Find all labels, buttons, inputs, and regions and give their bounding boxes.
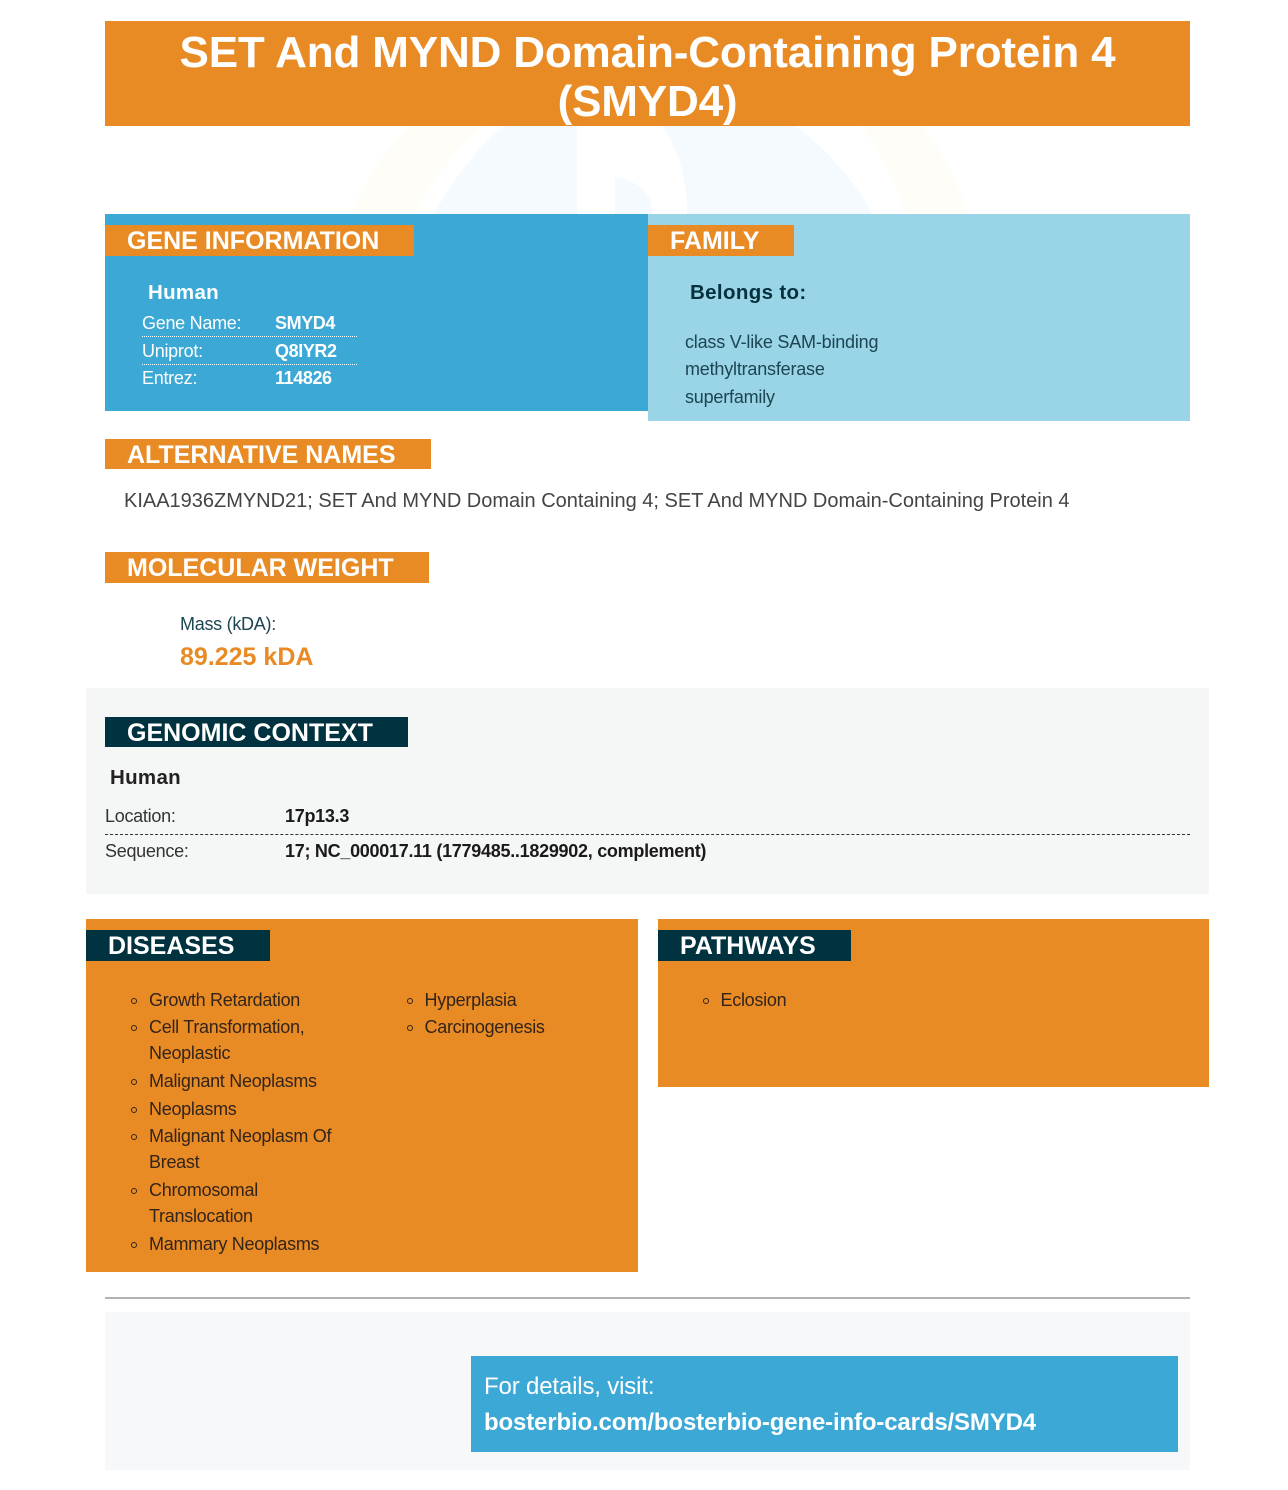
species label: Human [148,281,219,304]
disease list column 1: Translocation [149,1206,253,1226]
disease list column 1 [131,990,332,1254]
disease list column 1: Growth Retardation [149,990,300,1010]
disease list column 1: Breast [149,1152,199,1172]
uniprot row: Q8IYR2 [275,341,337,361]
family description [685,332,878,407]
disease list column 1: Malignant Neoplasms [149,1071,317,1091]
location row: Location: [105,806,176,826]
uniprot row: Uniprot: [142,341,203,361]
alternative names text: KIAA1936ZMYND21; SET And MYND Domain Containing 4; SET And MYND Domain-Containing Protein 4 [124,490,1069,512]
disease list column 1: Mammary Neoplasms [149,1234,319,1254]
entrez row: Entrez: [142,368,197,388]
details url: bosterbio.com/bosterbio-gene-info-cards/SMYD4 [484,1409,1036,1436]
heading: diseases [86,930,270,961]
watermark logo [434,126,872,214]
species label: Human [110,766,181,789]
heading: gene information: GENE INFORMATION [127,227,379,255]
disease list column 2 [407,990,545,1037]
heading: diseases: DISEASES [108,932,234,960]
heading: molecular weight: MOLECULAR WEIGHT [127,554,394,582]
panel: family [648,214,1190,421]
panel: pathways [658,919,1209,1087]
belongs to label: Belongs to: [690,281,807,304]
sequence row: 17; NC_000017.11 (1779485..1829902, complement) [285,841,706,861]
mass value: 89.225 kDA [180,643,313,671]
uniprot row [142,339,357,365]
gene name row [142,311,357,337]
disease list column 1: Neoplastic [149,1043,230,1063]
gene name row: SMYD4 [275,313,335,333]
details label: For details, visit: [484,1373,654,1400]
callout: details link [471,1356,1178,1452]
family description: methyltransferase [685,359,825,379]
heading: alternative names: ALTERNATIVE NAMES [127,441,396,469]
family description: superfamily [685,386,775,406]
disease list column 1: Chromosomal [149,1180,258,1200]
entrez row: 114826 [275,368,332,388]
gene name row: Gene Name: [142,313,241,333]
disease list column 1: Cell Transformation, [149,1017,304,1037]
heading: family: FAMILY [670,227,759,255]
family description: class V-like SAM-binding [685,332,878,352]
disease list column 1: Malignant Neoplasm Of [149,1126,331,1146]
title banner [105,21,1190,126]
location row [105,802,1190,835]
panel: genomic context [86,688,1209,894]
sequence row: Sequence: [105,841,189,861]
mass label: Mass (kDA): [180,614,276,634]
location row: 17p13.3 [285,806,349,826]
panel: footer [105,1312,1190,1470]
panel: gene information [105,214,648,411]
disease list column 2: Carcinogenesis [424,1017,545,1037]
heading: pathways [658,930,851,961]
panel: diseases [86,919,638,1272]
disease list column 1: Neoplasms [149,1099,237,1119]
pathway list: Eclosion [720,990,786,1010]
title banner: SET And MYND Domain-Containing Protein 4 [180,28,1115,77]
disease list column 2: Hyperplasia [424,990,516,1010]
heading: pathways: PATHWAYS [680,932,816,960]
heading: genomic context: GENOMIC CONTEXT [127,719,373,747]
heading: family [648,225,794,256]
title banner: (SMYD4) [558,77,737,126]
entrez row [142,368,332,388]
